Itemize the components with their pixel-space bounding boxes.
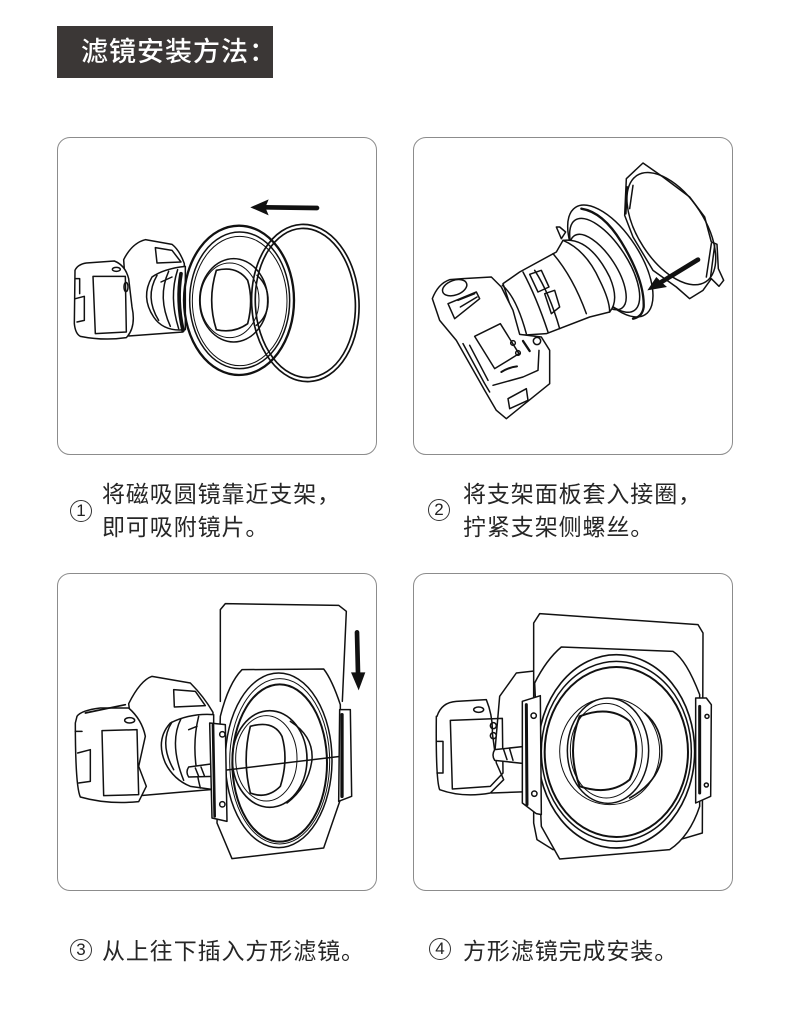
panel: step 1 illustration <box>57 137 377 455</box>
step 1 number <box>70 500 92 522</box>
lens barrel <box>502 240 615 335</box>
step 1 caption: 将磁吸圆镜靠近支架， <box>102 481 341 507</box>
step 2 number <box>428 499 450 521</box>
panel: step 2 illustration <box>413 137 733 455</box>
adapter ring with inner lens <box>179 226 294 375</box>
filter sheet <box>534 614 703 850</box>
panel: step 3 illustration <box>57 573 377 891</box>
arrow <box>250 199 317 215</box>
step 2 caption: 将支架面板套入接圈， <box>463 481 702 507</box>
step 1 caption <box>102 481 341 540</box>
camera body <box>74 240 184 339</box>
step 2 number: 2 <box>434 500 444 519</box>
step 4 caption: 方形滤镜完成安装。 <box>463 938 678 964</box>
adapter ring <box>551 191 670 331</box>
knob <box>493 746 525 764</box>
step 2 caption <box>463 481 702 540</box>
step 1 caption: 即可吸附镜片。 <box>102 514 269 540</box>
magnetic filter ring <box>248 222 363 384</box>
filter holder <box>217 669 340 859</box>
side strips <box>210 710 352 821</box>
step 4 number <box>429 938 451 960</box>
title: 滤镜安装方法： <box>81 37 277 67</box>
step 3 number: 3 <box>76 940 86 959</box>
lens and knob <box>161 714 214 790</box>
step 3 caption: 从上往下插入方形滤镜。 <box>102 938 365 964</box>
lens barrel <box>147 266 185 330</box>
camera body <box>75 676 213 803</box>
step 3 number <box>70 939 92 961</box>
side strips <box>522 696 711 815</box>
filter sheet <box>220 604 346 701</box>
title <box>57 26 273 78</box>
arrow <box>351 632 365 690</box>
camera body <box>436 670 540 795</box>
camera body <box>432 276 550 419</box>
step 4 number: 4 <box>435 939 445 958</box>
panel: step 4 illustration <box>413 573 733 891</box>
step 1 number: 1 <box>76 501 86 520</box>
filter holder <box>535 647 700 859</box>
step 2 caption: 拧紧支架侧螺丝。 <box>463 514 654 540</box>
filter holder <box>609 157 734 300</box>
arrow <box>647 260 698 290</box>
